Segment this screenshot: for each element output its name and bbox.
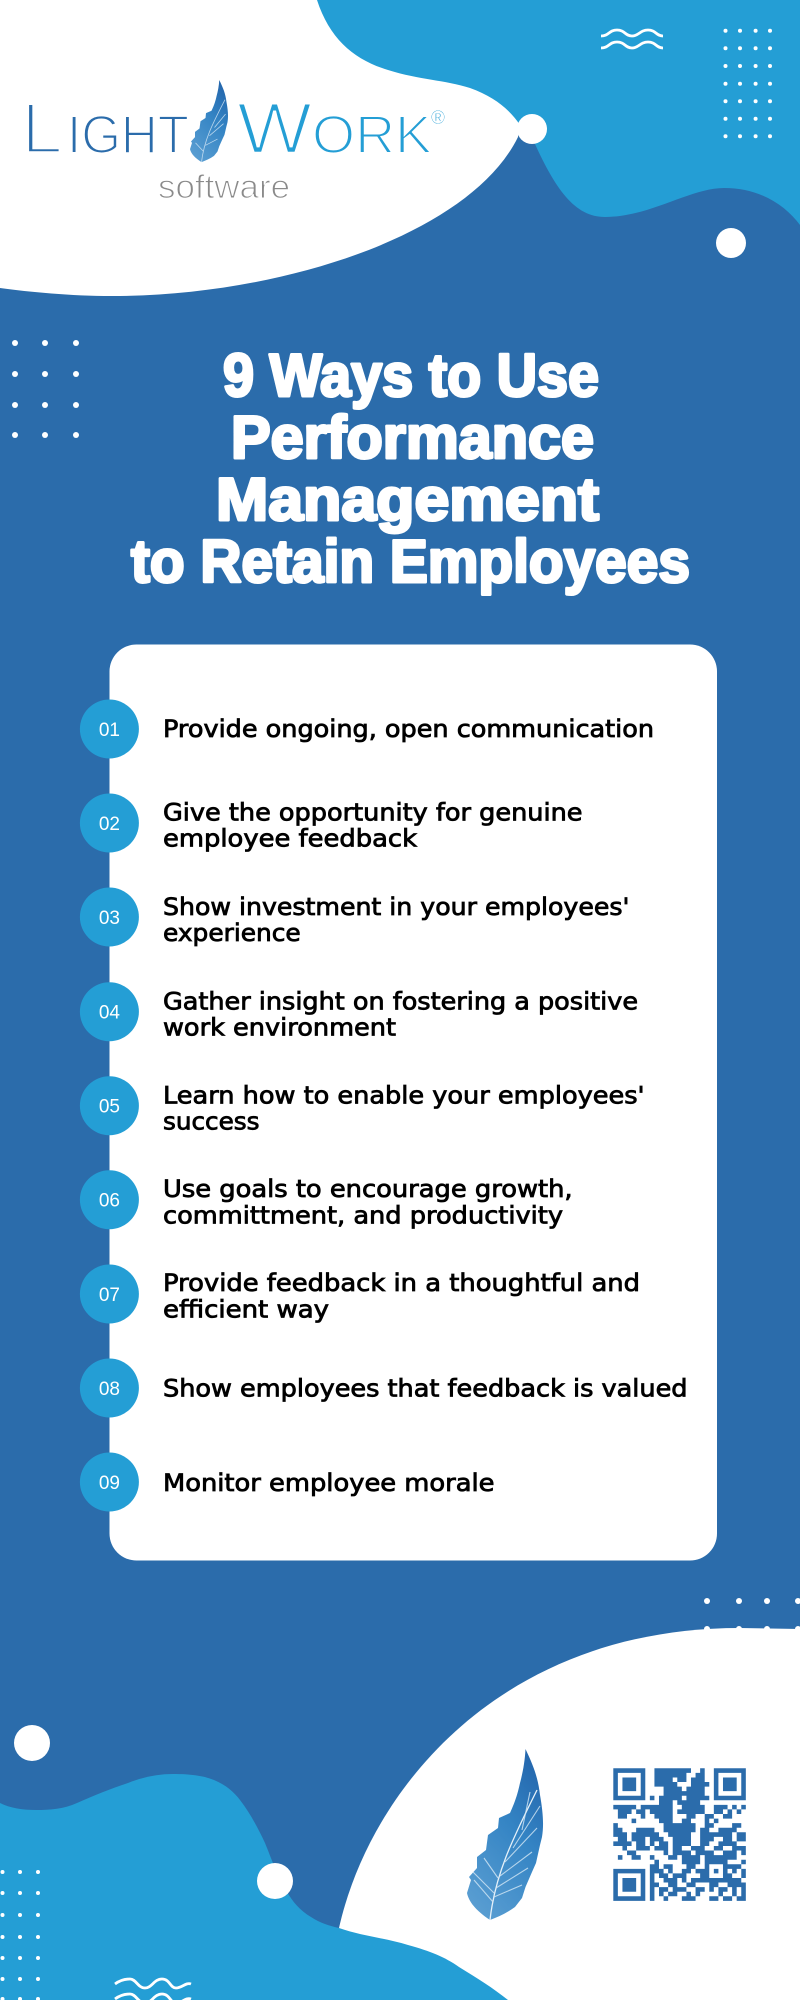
item 06 (80, 1170, 573, 1229)
bottom white blob (339, 1628, 800, 2000)
item 09: 09 (99, 1473, 120, 1494)
logo: LightWork software (21, 80, 445, 205)
title: Management (216, 466, 599, 533)
item 03: 03 (99, 908, 120, 929)
item 03 (80, 888, 629, 947)
panel: list card (110, 644, 717, 1560)
item 05 (80, 1076, 645, 1135)
item 05: Learn how to enable your employees' (163, 1081, 645, 1109)
waves top (601, 30, 663, 48)
title: 9 Ways to Use (223, 342, 599, 409)
waves bottom (115, 1979, 191, 2000)
item 07: Provide feedback in a thoughtful and (163, 1269, 640, 1297)
item 02: employee feedback (163, 825, 417, 853)
item 07: efficient way (163, 1296, 329, 1324)
item 06: Use goals to encourage growth, (163, 1175, 573, 1203)
item 05: success (163, 1107, 260, 1135)
item 04: 04 (99, 1003, 120, 1024)
logo: LightWork software: L (21, 89, 63, 169)
item 04 (80, 982, 638, 1041)
white dot lower left (14, 1725, 50, 1761)
item 02 (80, 794, 583, 853)
item 08 (80, 1358, 687, 1418)
top light blue blob (300, 0, 800, 225)
white dot lower middle (257, 1863, 293, 1899)
item 08: 08 (99, 1379, 120, 1400)
item 03: Show investment in your employees' (163, 893, 629, 921)
logo: LightWork software: software (158, 168, 290, 205)
dots bottom left (0, 1870, 40, 2000)
item 01: 01 (99, 720, 120, 741)
item 02: 02 (99, 814, 120, 835)
icon: logo feather (190, 80, 228, 162)
logo: LightWork software: ORK (312, 105, 432, 165)
item 04: work environment (163, 1013, 396, 1041)
logo: LightWork software: IGHT (67, 105, 189, 165)
top white blob (0, 0, 520, 296)
white dot top (517, 114, 547, 144)
icon: large feather (467, 1749, 543, 1920)
dots bottom right (704, 1598, 800, 1632)
item 07: 07 (99, 1285, 120, 1306)
item 06: committment, and productivity (163, 1201, 563, 1229)
logo: LightWork software: ® (431, 108, 445, 129)
item 04: Gather insight on fostering a positive (163, 987, 638, 1015)
title: Performance (231, 404, 594, 471)
title (131, 342, 690, 595)
item 05: 05 (99, 1097, 120, 1118)
logo: LightWork software: W (237, 89, 312, 169)
white dot upper right (716, 228, 746, 258)
item 01: Provide ongoing, open communication (163, 715, 654, 743)
item 08: Show employees that feedback is valued (163, 1375, 688, 1403)
item 01 (80, 700, 654, 758)
item 06: 06 (99, 1191, 120, 1212)
title: to Retain Employees (131, 528, 690, 595)
item 09 (80, 1452, 495, 1512)
item 03: experience (163, 919, 301, 947)
dots left of title (12, 340, 79, 438)
bottom light blue blob (0, 1774, 508, 2000)
item 02: Give the opportunity for genuine (163, 798, 582, 826)
dots top right (724, 29, 772, 138)
item 09: Monitor employee morale (163, 1469, 494, 1497)
item 07 (80, 1264, 640, 1324)
QR code (613, 1771, 746, 1899)
